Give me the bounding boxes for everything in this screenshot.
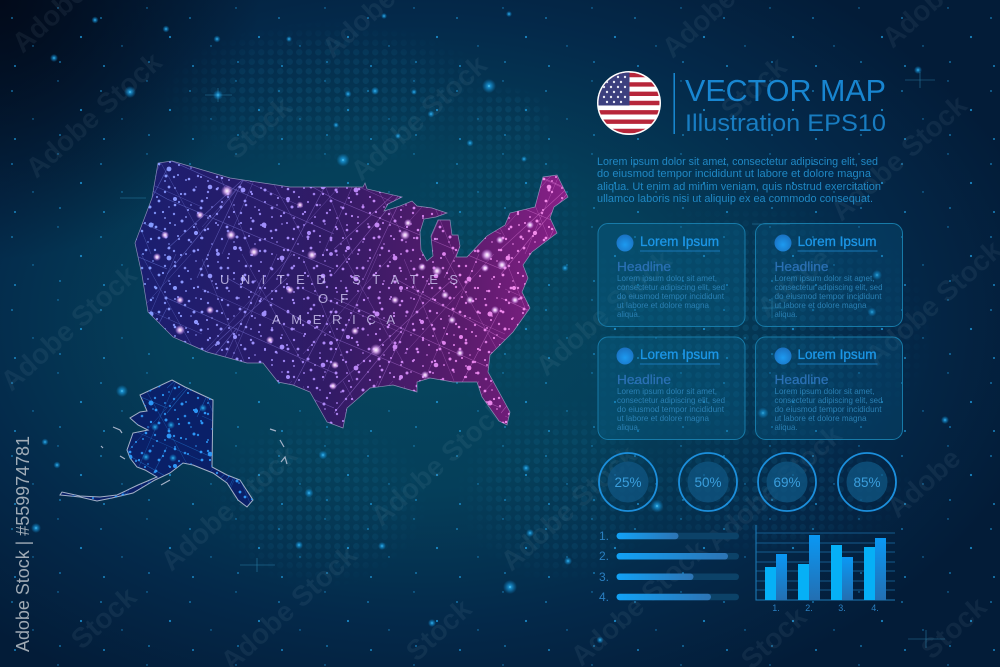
map: Alaska: [60, 380, 287, 507]
map label: [220, 272, 458, 327]
panel: bottom right: [756, 337, 902, 440]
panel: bottom left: Lorem ipsum dolor sit amet,: [617, 386, 717, 396]
bar chart: 2.: [805, 603, 813, 613]
stock watermarks: Adobe: [881, 442, 966, 524]
stock watermarks: Stock: [220, 91, 298, 165]
stock watermarks: Adobe Stock: [530, 244, 678, 382]
progress bars: 1.: [599, 529, 609, 543]
bar chart: 3.: [838, 603, 846, 613]
progress bars: 4.: [599, 590, 609, 604]
intro paragraph: [597, 156, 881, 205]
intro paragraph: ullamco laboris nisi ut aliquip ex ea commodo consequat.: [597, 193, 873, 205]
panel: top right: Headline: [774, 259, 828, 274]
subtitle: Illustration EPS10: [685, 110, 886, 137]
map: contiguous United States: [135, 161, 568, 428]
panel: bottom left: do eiusmod tempor incididunt: [617, 404, 725, 414]
title divider: [674, 73, 675, 134]
panel: top right: consectetur adipiscing elit, sed: [774, 282, 883, 292]
panel: top left: do eiusmod tempor incididunt: [617, 291, 725, 301]
percentage rings: 25%: [614, 474, 642, 490]
bright city lights: [153, 185, 534, 390]
percentage rings: 50%: [694, 474, 722, 490]
intro paragraph: aliqua. Ut enim ad minim veniam, quis nostrud exercitation: [597, 181, 881, 193]
panel: top left: Headline: [617, 259, 671, 274]
bar chart: 4.: [871, 603, 879, 613]
panel: top left: [598, 224, 745, 326]
stock watermarks: Stock: [715, 51, 793, 125]
percentage rings: 69%: [774, 474, 800, 490]
panel: bottom left: Lorem Ipsum: [640, 347, 719, 362]
panel: top left: consectetur adipiscing elit, sed: [617, 282, 725, 292]
panel: top left: ut labore et dolore magna: [617, 300, 709, 310]
title: VECTOR MAP: [685, 73, 886, 108]
progress bars: [599, 529, 739, 604]
panel: bottom right: Headline: [774, 372, 828, 387]
stock watermarks: Adobe Stock: [700, 419, 848, 557]
stock watermarks: Adobe Stock: [825, 89, 973, 227]
stock watermarks: Adobe Stock: [155, 439, 303, 577]
map label: AMERICA: [272, 312, 395, 327]
panel: bottom right: do eiusmod tempor incididunt: [774, 404, 882, 414]
stock watermarks: Stock: [65, 581, 143, 655]
panel: bottom right: ut labore et dolore magna: [774, 413, 867, 423]
panel: top left: Lorem ipsum dolor sit amet,: [617, 273, 717, 283]
progress bars: 2.: [599, 549, 609, 563]
map label: UNITED STATES: [220, 272, 458, 287]
stock watermarks: Adobe Stock: [495, 439, 643, 577]
stock watermarks: Stock: [400, 593, 478, 667]
map label: OF: [318, 291, 348, 306]
panel: top right: aliqua.: [774, 309, 798, 319]
intro paragraph: do eiusmod tempor incididunt ut labore et dolore magna: [597, 168, 872, 180]
intro paragraph: Lorem ipsum dolor sit amet, consectetur adipiscing elit, sed: [597, 156, 878, 168]
panel: top right: [756, 224, 902, 326]
panel: top right: do eiusmod tempor incididunt: [774, 291, 882, 301]
stock watermarks: Adobe Stock: [365, 394, 513, 532]
panel: bottom right: consectetur adipiscing elit, sed: [774, 395, 883, 405]
panel: bottom left: aliqua.: [617, 422, 640, 432]
panel: bottom left: consectetur adipiscing elit, sed: [617, 395, 725, 405]
panel: bottom left: ut labore et dolore magna: [617, 413, 709, 423]
stock watermarks: Adobe Stock: [20, 46, 168, 184]
panel: bottom right: aliqua.: [774, 422, 798, 432]
panel: top right: Lorem ipsum dolor sit amet,: [774, 273, 874, 283]
panel: bottom left: [598, 337, 745, 440]
panel: bottom left: Headline: [617, 372, 671, 387]
flag badge: [597, 71, 661, 135]
panel: bottom right: Lorem ipsum dolor sit amet,: [774, 386, 874, 396]
panel: top left: aliqua.: [617, 309, 640, 319]
stock watermarks: Stock: [915, 591, 993, 665]
progress bars: 3.: [599, 570, 609, 584]
stock watermarks: Adobe Stock: [345, 49, 493, 187]
panel: top right: Lorem Ipsum: [798, 234, 876, 249]
bar chart: 1.: [772, 603, 780, 613]
panel: bottom right: Lorem Ipsum: [798, 347, 876, 362]
panel: top left: Lorem Ipsum: [640, 234, 719, 249]
stock watermarks: Adobe: [751, 242, 836, 324]
percentage rings: [599, 453, 896, 511]
percentage rings: 85%: [854, 474, 880, 490]
vertical stock id: Adobe Stock | #559974781: [13, 436, 33, 652]
panel: top right: ut labore et dolore magna: [774, 300, 867, 310]
bar chart: [756, 525, 895, 613]
